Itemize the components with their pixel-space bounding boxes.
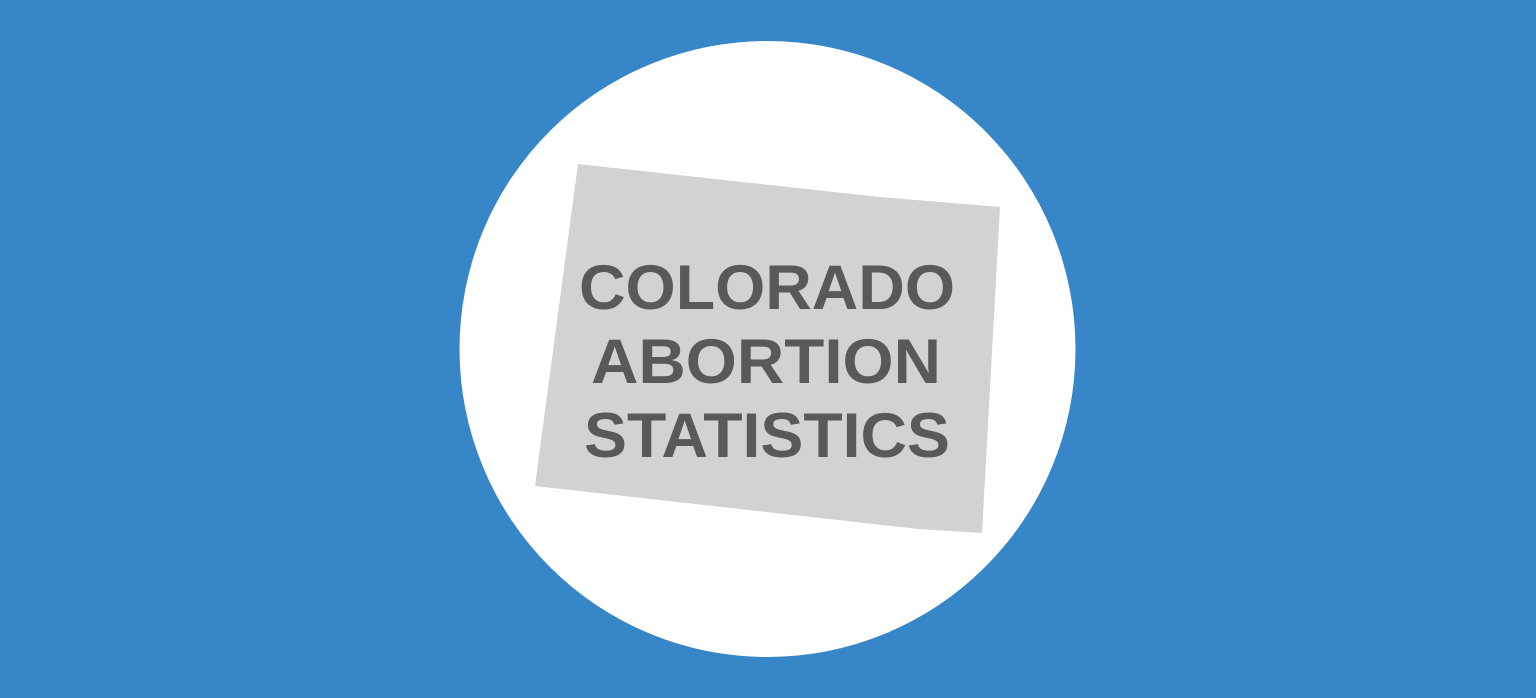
title: STATISTICS <box>584 401 950 471</box>
title <box>579 253 955 471</box>
white circle <box>460 41 1076 657</box>
colorado state shape <box>535 164 1000 533</box>
title: COLORADO <box>579 253 955 323</box>
title: ABORTION <box>591 327 941 397</box>
